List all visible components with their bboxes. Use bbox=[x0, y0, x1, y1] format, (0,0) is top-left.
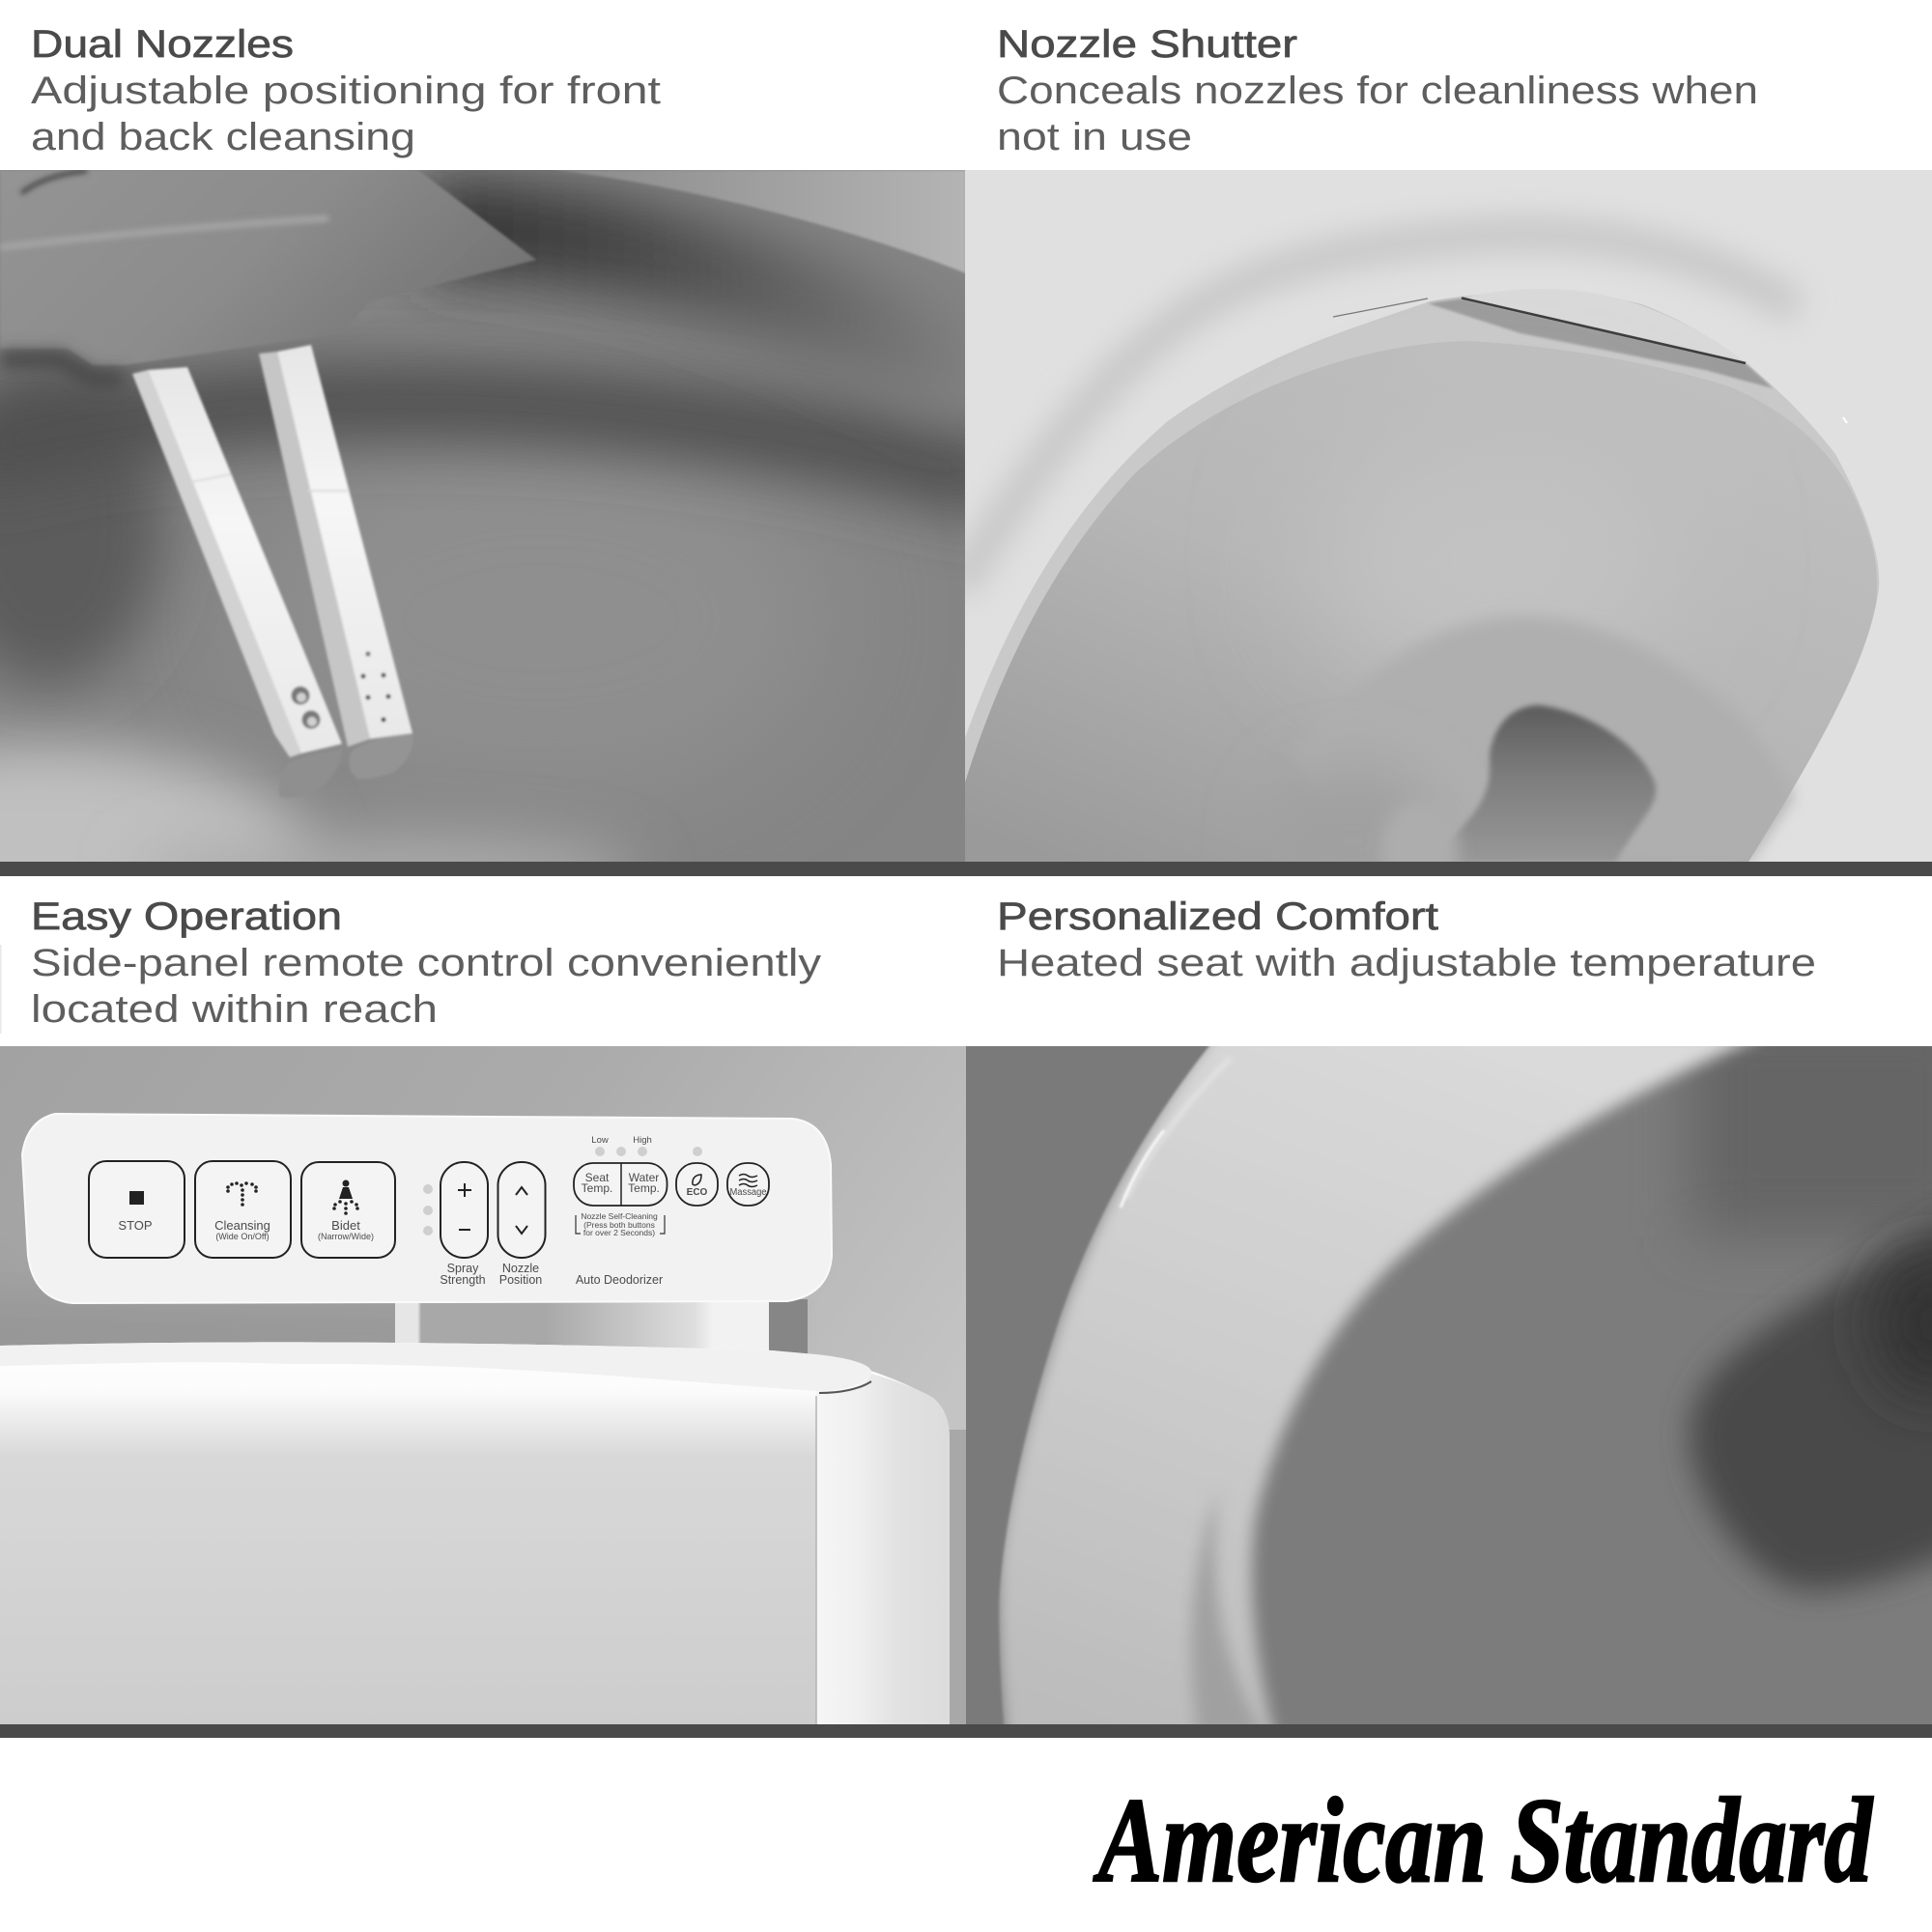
button: bidet: Bidet bbox=[331, 1218, 360, 1233]
heading block: Personalized Comfort: Personalized Comfort bbox=[997, 895, 1438, 938]
heading block: Nozzle Shutter: Nozzle Shutter bbox=[997, 23, 1297, 66]
tank body bbox=[0, 1342, 950, 1724]
button: cleansing: (Wide On/Off) bbox=[215, 1232, 270, 1241]
button: seat and water temperature bbox=[574, 1163, 667, 1206]
photo panel: easy operation bbox=[0, 1046, 976, 1739]
button: stop: STOP bbox=[118, 1218, 153, 1233]
divider bar: bottom row bbox=[0, 1724, 1932, 1738]
heading block: Easy Operation: Easy Operation bbox=[31, 895, 342, 938]
photo panel: personalized comfort bbox=[956, 1005, 1932, 1739]
button: eco bbox=[676, 1163, 718, 1206]
button: nozzle position: Nozzle bbox=[502, 1262, 539, 1275]
heading block: Easy Operation: located within reach bbox=[31, 988, 438, 1031]
button: massage bbox=[727, 1163, 769, 1206]
button: nozzle position bbox=[498, 1162, 545, 1287]
heading block: Easy Operation bbox=[31, 895, 821, 1031]
button: stop bbox=[89, 1161, 185, 1258]
nozzle self-cleaning note: for over 2 Seconds) bbox=[583, 1228, 655, 1237]
button: seat and water temperature: Water bbox=[629, 1171, 659, 1184]
remote control panel bbox=[22, 1114, 832, 1303]
heading block: Dual Nozzles: and back cleansing bbox=[31, 116, 415, 158]
photo panel: dual nozzles bbox=[0, 170, 965, 862]
heading block: Nozzle Shutter: Conceals nozzles for cleanliness when bbox=[997, 70, 1758, 112]
button: nozzle position: Position bbox=[499, 1273, 542, 1287]
icon: drain bbox=[1385, 701, 1658, 862]
button: spray strength: Strength bbox=[440, 1273, 486, 1287]
button: cleansing bbox=[195, 1161, 291, 1258]
heading block: Personalized Comfort: Heated seat with adjustable temperature bbox=[997, 942, 1816, 984]
button: massage: Massage bbox=[730, 1187, 767, 1198]
support arm bbox=[395, 1299, 808, 1357]
label: auto deodorizer: Auto Deodorizer bbox=[576, 1273, 663, 1287]
button: seat and water temperature: Temp. bbox=[582, 1181, 612, 1195]
button: seat and water temperature: Temp. bbox=[628, 1181, 660, 1195]
button: seat and water temperature: Seat bbox=[585, 1171, 610, 1184]
button: spray strength bbox=[440, 1162, 488, 1287]
icon: left nozzle bbox=[132, 367, 342, 797]
divider bar: top row bbox=[0, 862, 1932, 876]
heading block: Nozzle Shutter: not in use bbox=[997, 116, 1192, 158]
heading block: Personalized Comfort bbox=[997, 895, 1816, 984]
heading block: Dual Nozzles bbox=[31, 23, 661, 158]
button: eco: ECO bbox=[687, 1187, 708, 1198]
heading block: Dual Nozzles: Adjustable positioning for front bbox=[31, 70, 661, 112]
button: spray strength: Spray bbox=[447, 1262, 479, 1275]
heading block: Dual Nozzles: Dual Nozzles bbox=[31, 23, 294, 66]
icon: right nozzle bbox=[259, 345, 413, 779]
nozzle self-cleaning note bbox=[576, 1211, 665, 1237]
heading block: Nozzle Shutter bbox=[997, 23, 1758, 158]
temperature level indicators bbox=[591, 1135, 702, 1156]
nozzle self-cleaning note: (Press both buttons bbox=[583, 1220, 655, 1230]
photo panel: nozzle shutter bbox=[956, 170, 1932, 918]
heading block: Easy Operation: Side-panel remote control conveniently bbox=[31, 942, 821, 984]
nozzle self-cleaning note: Nozzle Self-Cleaning bbox=[581, 1211, 658, 1221]
button: cleansing: Cleansing bbox=[214, 1218, 270, 1233]
indicator dots: spray strength bbox=[423, 1184, 433, 1236]
temperature level indicators: Low bbox=[591, 1135, 609, 1146]
temperature level indicators: High bbox=[633, 1135, 652, 1146]
button: bidet bbox=[301, 1162, 395, 1258]
button: bidet: (Narrow/Wide) bbox=[318, 1232, 374, 1241]
icon: nozzle shutter slit bbox=[1333, 289, 1773, 388]
